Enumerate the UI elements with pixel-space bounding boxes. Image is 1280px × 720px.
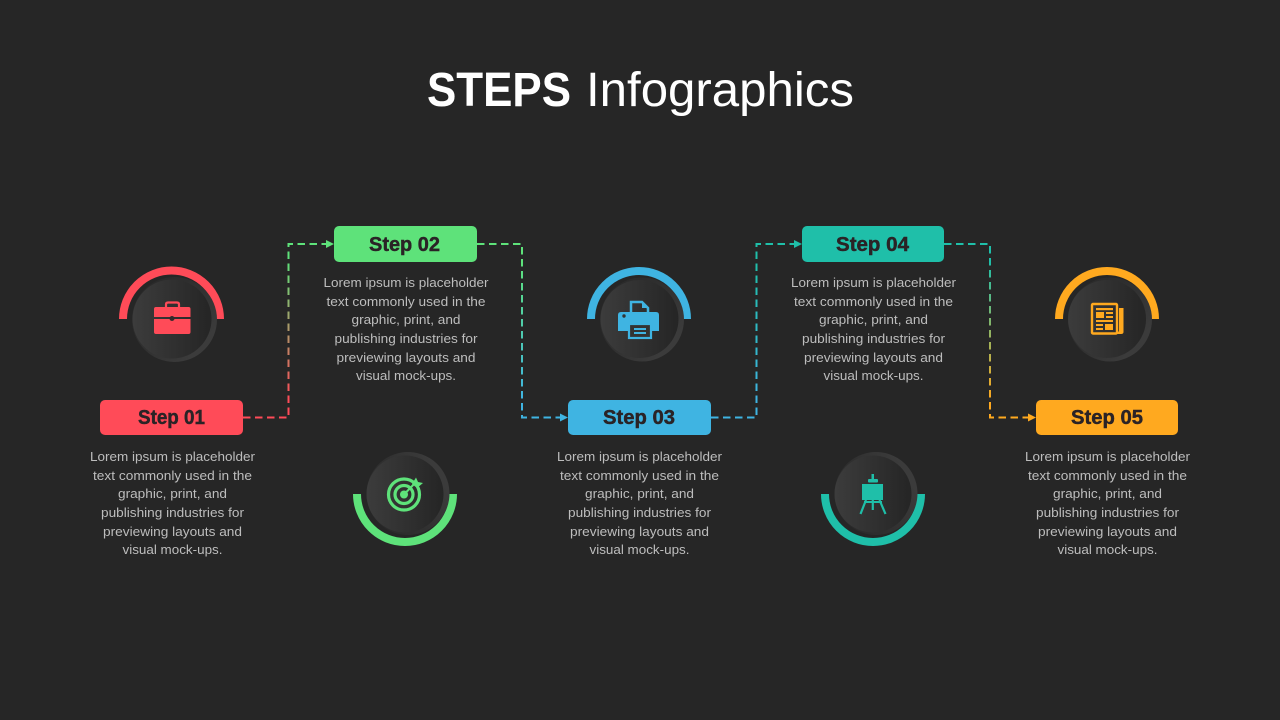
text: step 03 description <box>557 450 722 557</box>
text: step 01 description: publishing industries for <box>101 506 244 520</box>
label: step 02 <box>334 226 477 262</box>
label: step 03 <box>568 400 711 435</box>
panel: step 05 <box>1025 271 1190 557</box>
arrow: step 04 to step 05 <box>944 244 1036 422</box>
text: step 01 description: visual mock-ups. <box>122 543 222 557</box>
text: step 02 description: publishing industries for <box>334 332 478 346</box>
panel: step 03 <box>557 271 722 557</box>
arc: blue <box>591 271 687 319</box>
icon: easel <box>860 474 886 514</box>
disc: step 03 <box>600 278 684 362</box>
text: step 04 description <box>791 276 956 383</box>
label: step 04: Step 04 <box>836 233 910 256</box>
text: step 01 description: Lorem ipsum is placeholder <box>90 450 255 464</box>
text: step 05 description: text commonly used in the <box>1028 469 1187 483</box>
text: step 01 description: graphic, print, and <box>118 487 227 501</box>
text: step 05 description <box>1025 450 1190 557</box>
text: step 05 description: graphic, print, and <box>1053 487 1162 501</box>
disc: step 02 <box>355 440 461 547</box>
text: step 02 description: previewing layouts and <box>336 351 476 365</box>
text: step 04 description: visual mock-ups. <box>824 369 924 383</box>
panel: step 01 <box>90 271 255 557</box>
arc: orange <box>1059 271 1155 319</box>
text: step 05 description: Lorem ipsum is placeholder <box>1025 450 1190 464</box>
icon: printer <box>618 302 659 338</box>
label: step 02: Step 02 <box>369 233 440 256</box>
arc: teal <box>825 494 921 542</box>
text: step 02 description: graphic, print, and <box>352 313 461 327</box>
label: step 04 <box>802 226 944 262</box>
title: STEPS <box>427 64 571 117</box>
text: step 03 description: visual mock-ups. <box>590 543 690 557</box>
icon: newspaper <box>1092 304 1124 334</box>
text: step 03 description: publishing industries for <box>568 506 711 520</box>
text: step 03 description: Lorem ipsum is placeholder <box>557 450 722 464</box>
text: step 05 description: previewing layouts and <box>1038 525 1177 539</box>
text: step 03 description: graphic, print, and <box>585 487 694 501</box>
label: step 05: Step 05 <box>1071 406 1143 429</box>
text: step 04 description: previewing layouts and <box>804 351 943 365</box>
text: step 02 description: Lorem ipsum is placeholder <box>324 276 488 290</box>
text: step 01 description: text commonly used in the <box>93 469 252 483</box>
disc: step 04 <box>823 440 929 547</box>
text: step 02 description: text commonly used in the <box>326 295 486 309</box>
text: step 05 description: publishing industries for <box>1036 506 1179 520</box>
arc: green <box>357 494 453 542</box>
icon: briefcase <box>154 302 190 334</box>
text: step 04 description: Lorem ipsum is placeholder <box>791 276 956 290</box>
text: step 01 description: previewing layouts and <box>103 525 242 539</box>
panel: step 04 <box>791 226 956 547</box>
text: step 04 description: publishing industries for <box>802 332 945 346</box>
text: step 04 description: text commonly used in the <box>794 295 953 309</box>
label: step 01: Step 01 <box>138 406 205 429</box>
disc: step 01 <box>132 277 217 362</box>
label: step 05 <box>1036 400 1178 435</box>
text: step 03 description: text commonly used in the <box>560 469 719 483</box>
title: Infographics <box>586 64 854 117</box>
label: step 01 <box>100 400 243 435</box>
arrow: step 01 to step 02 <box>243 240 334 418</box>
arrow: step 02 to step 03 <box>477 244 568 422</box>
text: step 04 description: graphic, print, and <box>819 313 928 327</box>
text: step 05 description: visual mock-ups. <box>1058 543 1158 557</box>
text: step 02 description: visual mock-ups. <box>356 369 456 383</box>
text: step 03 description: previewing layouts and <box>570 525 709 539</box>
arrow: step 03 to step 04 <box>711 240 802 418</box>
panel: step 02 <box>324 226 488 547</box>
arc: red <box>123 271 220 319</box>
text: step 01 description <box>90 450 255 557</box>
icon: target <box>388 478 423 510</box>
label: step 03: Step 03 <box>603 406 675 429</box>
text: step 02 description <box>324 276 488 383</box>
disc: step 05 <box>1068 278 1152 362</box>
